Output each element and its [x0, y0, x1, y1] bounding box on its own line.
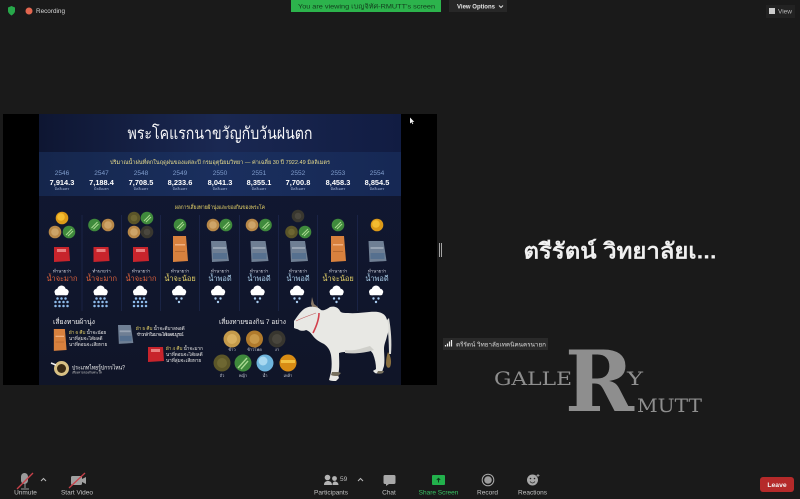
- participant name tag: [443, 338, 548, 350]
- chat control: Chat: [382, 490, 396, 496]
- food legend: ถั่ว: [220, 373, 224, 378]
- question link with icon: ประเภทไทยรู้ปกรรไหน?: [72, 364, 125, 372]
- forecast labels by year: น้ำจะน้อย: [322, 273, 354, 283]
- forecast labels by year: น้ำพอดี: [286, 273, 310, 283]
- food legend: [214, 317, 296, 378]
- food legend: งา: [275, 347, 279, 352]
- slide black letterbox: [3, 114, 437, 385]
- forecast labels by year: ทำนายว่า: [368, 268, 387, 274]
- yearly rainfall figures: 2547: [94, 170, 109, 177]
- yearly rainfall figures: 2552: [291, 170, 306, 177]
- infographic panel: [39, 114, 401, 385]
- yearly rainfall figures: 2548: [134, 170, 149, 177]
- Gallery RMUTT watermark: Y: [626, 368, 644, 390]
- cloth legend: ผ้า 5 คืบ น้ำจะดีบาลพอดี: [136, 325, 185, 331]
- yearly rainfall figures: 2549: [173, 170, 188, 177]
- share screen control: [419, 475, 459, 496]
- start video control: [61, 473, 93, 496]
- leave button: [760, 477, 794, 492]
- reactions control: [518, 474, 548, 496]
- yearly rainfall figures: 2554: [370, 170, 385, 177]
- forecast labels by year: น้ำพอดี: [365, 273, 389, 283]
- reactions control: Reactions: [518, 490, 548, 496]
- cloth packs by year: [54, 236, 386, 262]
- food legend: ข้าว: [228, 347, 236, 352]
- forecast labels by year: ทำนายว่า: [329, 268, 348, 274]
- participants control: 59: [340, 476, 348, 483]
- forecast labels by year: น้ำจะมาก: [126, 273, 156, 283]
- yearly rainfall figures: 2546: [55, 170, 70, 177]
- participant name: ตรีรัตน์ วิทยาลัยเ...: [524, 238, 716, 264]
- view options button: View Options: [457, 4, 495, 10]
- food legend: น้ำ: [263, 371, 267, 378]
- yearly rainfall figures: มิลลิเมตร: [291, 187, 305, 191]
- yearly rainfall figures: 2550: [213, 170, 228, 177]
- question link with icon: [51, 361, 125, 376]
- yearly rainfall figures: มิลลิเมตร: [331, 187, 345, 191]
- yearly rainfall figures: มิลลิเมตร: [213, 187, 227, 191]
- cloth legend: [53, 317, 203, 364]
- food legend: หญ้า: [239, 373, 247, 378]
- cloth legend: นาที่ลุ่มจะได้ผลดี: [69, 335, 103, 342]
- yearly rainfall figures: 8,458.3: [326, 178, 350, 187]
- forecast labels by year: น้ำพอดี: [247, 273, 271, 283]
- cloth legend: เสี่ยงทายผ้านุ่ง: [53, 317, 95, 326]
- cloth legend: นาที่ดอนจะเสียหาย: [69, 341, 107, 347]
- yearly rainfall figures: 8,854.5: [365, 178, 389, 187]
- forecast labels by year: น้ำจะมาก: [86, 273, 117, 283]
- forecast labels by year: ทำนายว่า: [211, 268, 230, 274]
- yearly rainfall figures: มิลลิเมตร: [55, 187, 69, 191]
- forecast labels by year: ทำนายว่า: [53, 268, 72, 274]
- Gallery RMUTT watermark: MUTT: [637, 395, 702, 417]
- viewing banner: You are viewing เบญจิทัศ-RMUTT's screen: [298, 2, 435, 10]
- yearly rainfall figures: 7,914.3: [50, 178, 74, 187]
- rainfall subtitle: ปริมาณน้ำฝนที่ตกในฤดูฝนของแต่ละปี กรมอุตุนิยมวิทยา — ค่าเฉลี่ย 30 ปี 7922.49 มิลลิเมตร: [110, 158, 330, 166]
- cloth legend: นาที่ดอนจะได้ผลดี: [166, 351, 203, 357]
- yearly rainfall figures: 7,708.5: [129, 178, 153, 187]
- share screen control: Share Screen: [419, 490, 459, 496]
- food legend: เหล้า: [284, 373, 292, 378]
- yearly rainfall figures: 8,041.3: [208, 178, 232, 187]
- cloth legend: ผ้า 6 คืบ น้ำจะน้อย: [69, 329, 106, 335]
- recording status: [8, 6, 65, 16]
- participants control: [314, 475, 363, 496]
- participant name tag: ตรีรัตน์ วิทยาลัยเทคนิคนครนายก: [456, 340, 546, 348]
- view options button: [449, 0, 507, 12]
- forecast labels by year: ทำนายว่า: [132, 268, 151, 274]
- food legend: ข้าวโพด: [247, 347, 262, 352]
- yearly rainfall figures: มิลลิเมตร: [134, 187, 148, 191]
- food choice circles by year: [49, 210, 383, 238]
- start video control: Start Video: [61, 490, 93, 496]
- forecast labels by year: [46, 268, 389, 283]
- recording status: Recording: [36, 8, 65, 15]
- yearly rainfall figures: 7,700.8: [286, 178, 310, 187]
- shared slide: [3, 114, 437, 385]
- view button: [766, 5, 795, 18]
- yearly rainfall figures: 8,233.6: [168, 178, 192, 187]
- leave button: Leave: [767, 482, 787, 489]
- viewing banner: [291, 0, 441, 12]
- yearly rainfall figures: 2551: [252, 170, 267, 177]
- rain icons by year: [54, 286, 383, 307]
- forecast labels by year: น้ำจะน้อย: [164, 273, 196, 283]
- unmute control: Unmute: [14, 490, 37, 496]
- forecast labels by year: น้ำจะมาก: [46, 273, 78, 283]
- forecast labels by year: ทำนายว่า: [171, 268, 190, 274]
- yearly rainfall figures: มิลลิเมตร: [252, 187, 266, 191]
- view button: View: [778, 8, 792, 16]
- Gallery RMUTT watermark: [494, 332, 702, 431]
- unmute control: [14, 473, 46, 496]
- yearly rainfall figures: มิลลิเมตร: [370, 187, 384, 191]
- cloth legend: ผ้า 4 คืบ น้ำจะมาก: [166, 345, 203, 351]
- forecast labels by year: ทำนายว่า: [289, 268, 308, 274]
- question link with icon: เสี่ยงทายของกินพระโค: [72, 370, 102, 374]
- forecast labels by year: ทำนายว่า: [92, 268, 111, 274]
- yearly rainfall figures: [50, 170, 389, 191]
- Gallery RMUTT watermark: R: [565, 332, 635, 431]
- mouse cursor: [410, 118, 414, 124]
- yearly rainfall figures: 8,355.1: [247, 178, 271, 187]
- participants control: Participants: [314, 490, 349, 496]
- food legend: เสี่ยงทายของกิน 7 อย่าง: [219, 317, 286, 326]
- Gallery RMUTT watermark: GALLE: [494, 368, 572, 390]
- yearly rainfall figures: 2553: [331, 170, 346, 177]
- yearly rainfall figures: 7,188.4: [89, 178, 115, 187]
- yearly rainfall figures: มิลลิเมตร: [94, 187, 109, 191]
- forecast labels by year: น้ำพอดี: [208, 273, 232, 283]
- cloth legend: ข้าวกล้าในนาจะได้ผลสมบูรณ์: [137, 331, 184, 338]
- panel resize handle: [440, 243, 442, 257]
- title: พระโคแรกนาขวัญกับวันฝนตก: [128, 123, 312, 143]
- yearly rainfall figures: มิลลิเมตร: [173, 187, 187, 191]
- record control: [477, 474, 498, 496]
- record control: Record: [477, 490, 498, 496]
- forecast labels by year: ทำนายว่า: [250, 268, 269, 274]
- cloth legend: นาที่ลุ่มจะเสียหาย: [166, 357, 201, 364]
- section heading: ผลการเสี่ยงทายผ้านุ่งและของกินของพระโค: [175, 203, 265, 211]
- chat control: [382, 475, 396, 496]
- white cow photo: [294, 297, 391, 381]
